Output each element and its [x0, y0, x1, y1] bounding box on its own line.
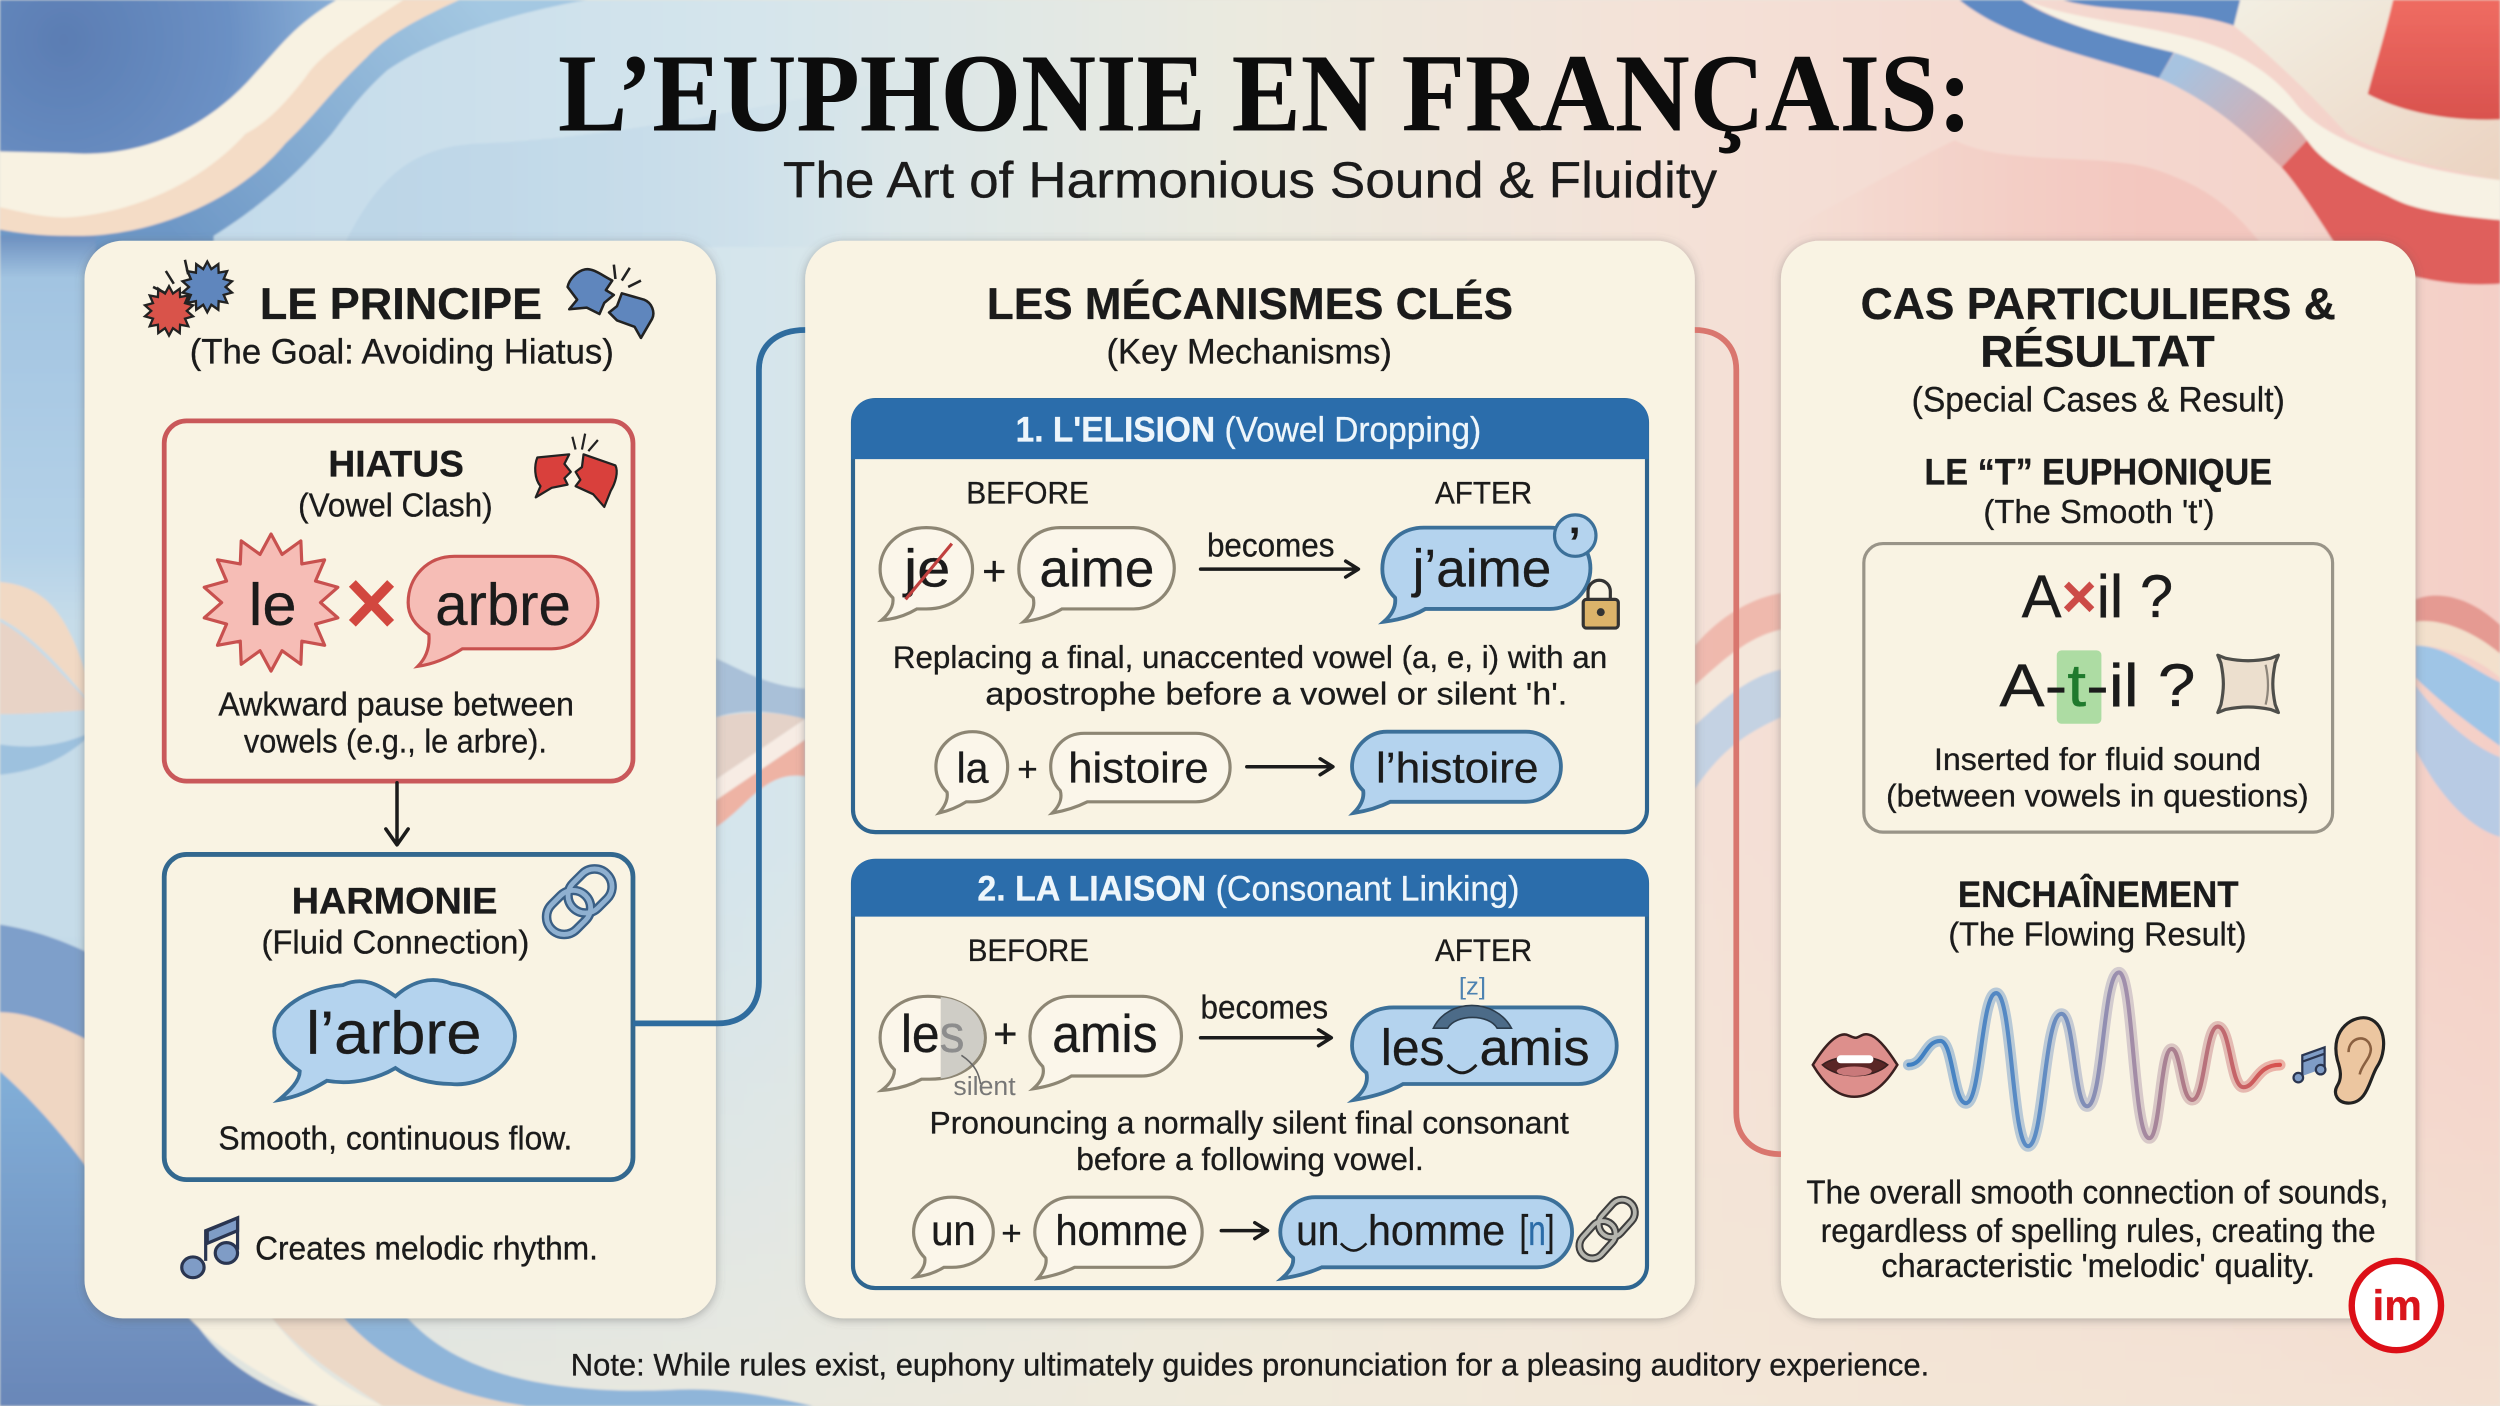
connector: harmonie to mechanisms	[633, 330, 805, 1023]
bubble: les with silent s	[880, 996, 1016, 1101]
arrow: becomes: becomes	[1207, 527, 1335, 564]
arrow: hiatus to harmonie	[386, 783, 408, 845]
subheading: special cases: (Special Cases & Result)	[1912, 380, 2285, 419]
bubble: un homme [n]: [n]	[1519, 1207, 1555, 1255]
header: l'elision: 1. L'ELISION (Vowel Dropping)	[1016, 411, 1481, 450]
text: enchainement description: characteristic 'melodic' quality.	[1881, 1248, 2315, 1285]
highlight: green t	[2057, 650, 2101, 724]
subheading: the smooth t: (The Smooth 't')	[1983, 494, 2215, 531]
heading: les mecanismes cles: LES MÉCANISMES CLÉS	[987, 279, 1513, 329]
subheading: vowel clash: (Vowel Clash)	[298, 487, 493, 524]
header: l'elision	[851, 398, 1649, 459]
bubble: histoire: histoire	[1068, 745, 1209, 793]
heading: cas particuliers	[1861, 280, 2336, 377]
heading: le principe: LE PRINCIPE	[260, 280, 542, 329]
heading: cas particuliers: CAS PARTICULIERS &	[1861, 280, 2336, 329]
plus sign: +	[1001, 1214, 1022, 1253]
bubble: je crossed out	[880, 528, 973, 620]
bubble: l'histoire: l’histoire	[1376, 745, 1539, 793]
label: after: AFTER	[1435, 475, 1532, 511]
bubble: un homme [n]	[1280, 1197, 1572, 1278]
bubble: un homme [n]: un	[1296, 1207, 1339, 1255]
icon: padlock	[1583, 580, 1618, 628]
arrow: becomes: becomes	[1201, 990, 1328, 1027]
icon: red clash bubbles	[535, 434, 617, 507]
card: la liaison	[851, 859, 1649, 1288]
sound wave	[1908, 972, 2280, 1146]
text: hiatus description: vowels (e.g., le arbre).	[244, 723, 547, 760]
header: la liaison: 2. LA LIAISON (Consonant Linking)	[977, 870, 1519, 909]
bubble: l'histoire	[1352, 732, 1561, 813]
text: hiatus description	[218, 687, 574, 760]
bubble: arbre: arbre	[435, 573, 571, 638]
text: t description: Inserted for fluid sound	[1934, 741, 2261, 777]
label: before: BEFORE	[968, 932, 1089, 968]
arrow: becomes	[1201, 990, 1331, 1046]
card: hiatus	[164, 421, 633, 781]
heading: le t euphonique: LE “T” EUPHONIQUE	[1924, 452, 2272, 493]
subheading: fluid connection: (Fluid Connection)	[261, 924, 529, 961]
subheading: key mechanisms: (Key Mechanisms)	[1107, 332, 1392, 371]
panel: le principe	[85, 241, 716, 1318]
text: enchainement description: regardless of spelling rules, creating the	[1821, 1213, 2376, 1250]
icon: grey chain link	[1574, 1194, 1640, 1264]
icon: red cross	[352, 583, 391, 623]
label: after: AFTER	[1435, 932, 1532, 968]
bubble: aime	[1019, 528, 1174, 622]
bubble: les with silent s: silent	[953, 1073, 1016, 1101]
bubble: j'aime	[1382, 528, 1590, 622]
card: harmonie	[164, 854, 633, 1180]
subheading: the flowing result: (The Flowing Result)	[1948, 916, 2246, 953]
icon: apostrophe badge	[1555, 515, 1596, 565]
icon: apostrophe badge: ’	[1569, 518, 1580, 565]
plus sign: +	[993, 1009, 1018, 1056]
heading: hiatus: HIATUS	[328, 444, 464, 485]
bubble: l'arbre	[274, 980, 515, 1100]
panel: cas particuliers et resultat	[1781, 241, 2415, 1318]
icon: clashing bursts	[145, 260, 232, 336]
subheading: the goal: (The Goal: Avoiding Hiatus)	[190, 332, 614, 371]
connector: mechanisms to special cases	[1695, 330, 1781, 1154]
subtitle: The Art of Harmonious Sound & Fluidity	[783, 152, 1718, 209]
bubble: la	[936, 732, 1008, 813]
plus sign: +	[982, 547, 1006, 594]
text: elision description: Replacing a final, unaccented vowel (a, e, i) with an	[893, 639, 1607, 675]
bubble: un: un	[931, 1207, 976, 1255]
text: harmonie description: Smooth, continuous flow.	[218, 1120, 572, 1157]
bubble: histoire	[1051, 733, 1230, 813]
arrow: becomes	[1201, 527, 1358, 577]
bubble: aime: aime	[1040, 540, 1154, 599]
title: L’EUPHONIE EN FRANÇAIS:	[558, 33, 1972, 156]
arrow	[1221, 1223, 1268, 1239]
bubble: le burst	[204, 534, 338, 671]
bubble: homme: homme	[1055, 1207, 1188, 1255]
logo: im badge: im	[2372, 1282, 2422, 1330]
bubble: j'aime: j’aime	[1411, 540, 1551, 599]
bubble: un	[914, 1197, 993, 1277]
bubble: les amis linked: les	[1381, 1019, 1445, 1076]
bubble: la: la	[957, 745, 989, 793]
text: liaison description: before a following vowel.	[1076, 1141, 1424, 1177]
card: t euphonique examples	[1864, 544, 2333, 832]
example: correct form: A-t-il ?	[1999, 651, 2195, 719]
bubble: un homme [n]: homme	[1368, 1207, 1505, 1255]
icon: clashing blue speech bubbles	[568, 265, 653, 338]
bubble: les amis linked: amis	[1480, 1019, 1590, 1076]
text: enchainement description	[1806, 1175, 2388, 1285]
text: t description: (between vowels in questions)	[1886, 778, 2309, 814]
bubble: les with silent s: les	[901, 1005, 965, 1064]
icon: ear	[2336, 1018, 2384, 1103]
arrow	[1247, 759, 1333, 775]
icon: small music notes	[2294, 1047, 2325, 1082]
heading: enchainement: ENCHAÎNEMENT	[1958, 873, 2239, 915]
text: liaison description	[930, 1104, 1569, 1177]
bubble: l'arbre: l’arbre	[306, 999, 482, 1067]
text: creates melodic rhythm: Creates melodic rhythm.	[255, 1230, 598, 1267]
plus sign: +	[1017, 750, 1038, 789]
card: l'elision	[851, 398, 1649, 832]
label: before: BEFORE	[966, 475, 1089, 511]
text: elision description	[893, 639, 1607, 712]
bubble: les amis linked: [z]	[1459, 974, 1486, 1001]
text: elision description: apostrophe before a vowel or silent 'h'.	[985, 676, 1567, 712]
header: la liaison	[851, 859, 1649, 917]
text: enchainement description: The overall smooth connection of sounds,	[1806, 1175, 2388, 1212]
icon: music notes	[182, 1218, 238, 1278]
bubble: les amis linked	[1352, 974, 1617, 1100]
bubble: homme	[1035, 1197, 1202, 1278]
example: wrong form: A×il ?	[2022, 562, 2173, 630]
heading: harmonie: HARMONIE	[292, 880, 497, 921]
footnote: Note: While rules exist, euphony ultimately guides pronunciation for a pleasing auditory experience.	[571, 1347, 1929, 1383]
bubble: arbre	[408, 556, 598, 666]
heading: cas particuliers: RÉSULTAT	[1980, 327, 2215, 377]
icon: lips	[1813, 1034, 1897, 1097]
logo: im badge	[2352, 1261, 2441, 1350]
icon: chain link	[539, 862, 619, 942]
bubble: le burst: le	[249, 573, 297, 638]
bubble: je crossed out: je	[902, 540, 950, 599]
text: t description	[1886, 741, 2309, 814]
text: liaison description: Pronouncing a normally silent final consonant	[930, 1104, 1569, 1140]
text: hiatus description: Awkward pause between	[218, 687, 574, 724]
icon: pillow	[2218, 655, 2278, 713]
bubble: amis: amis	[1052, 1005, 1158, 1064]
panel: les mecanismes cles	[805, 241, 1695, 1318]
bubble: amis	[1030, 996, 1181, 1089]
